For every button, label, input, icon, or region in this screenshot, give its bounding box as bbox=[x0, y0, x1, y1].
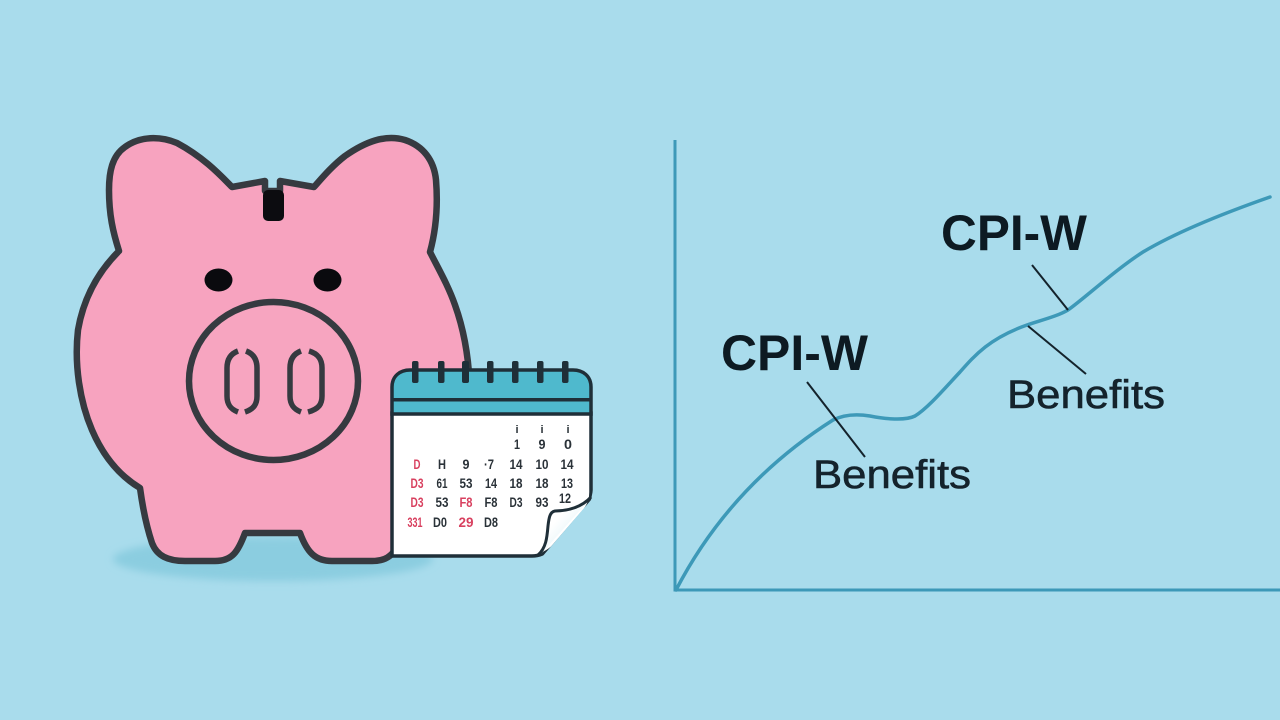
calendar dates: 12 bbox=[559, 490, 571, 506]
calendar dates: 53 bbox=[460, 475, 473, 491]
calendar dates: D bbox=[414, 456, 420, 472]
chart axes bbox=[675, 140, 1280, 590]
calendar dates: 0 bbox=[564, 436, 572, 452]
calendar dates: i bbox=[566, 424, 570, 436]
calendar dates: F8 bbox=[460, 494, 473, 510]
header divider bbox=[392, 398, 591, 402]
left Benefits label: Benefits bbox=[813, 453, 971, 497]
calendar dates: 93 bbox=[536, 494, 549, 510]
calendar dates: ·7 bbox=[484, 456, 494, 472]
page curl bbox=[538, 490, 600, 560]
right CPI-W leader line bbox=[1032, 265, 1068, 310]
binder rings bbox=[412, 361, 568, 383]
calendar dates: D3 bbox=[410, 475, 424, 491]
calendar dates: 13 bbox=[561, 475, 573, 491]
calendar dates: D8 bbox=[484, 514, 498, 530]
calendar bbox=[392, 361, 600, 560]
right CPI-W label: CPI-W bbox=[941, 205, 1088, 261]
calendar dates: D0 bbox=[433, 514, 447, 530]
calendar dates: 14 bbox=[560, 456, 574, 472]
calendar dates: 14 bbox=[485, 475, 497, 491]
calendar dates: 1 bbox=[514, 436, 520, 452]
calendar dates: 61 bbox=[436, 475, 448, 491]
left CPI-W leader line bbox=[807, 382, 865, 457]
calendar dates: i bbox=[515, 424, 519, 436]
piggy bank illustration bbox=[77, 138, 470, 581]
right nostril bbox=[290, 351, 322, 412]
calendar dates: 9 bbox=[538, 436, 546, 452]
calendar dates: i bbox=[540, 424, 544, 436]
calendar dates: D3 bbox=[410, 494, 424, 510]
calendar dates: 14 bbox=[510, 456, 523, 472]
left eye bbox=[204, 268, 232, 292]
calendar dates: F8 bbox=[484, 494, 498, 510]
pig body bbox=[77, 138, 470, 561]
calendar dates: 10 bbox=[536, 456, 549, 472]
calendar header bbox=[392, 370, 591, 414]
calendar dates: 331 bbox=[408, 514, 423, 530]
left nostril bbox=[227, 351, 257, 412]
calendar dates: 18 bbox=[510, 475, 523, 491]
right Benefits leader line bbox=[1028, 326, 1086, 374]
line chart bbox=[675, 140, 1280, 590]
right eye bbox=[314, 268, 342, 292]
calendar page bbox=[392, 412, 591, 556]
coin slot bbox=[263, 190, 284, 221]
snout bbox=[189, 302, 358, 460]
calendar dates bbox=[408, 424, 574, 530]
benefits curve bbox=[676, 197, 1270, 590]
calendar dates: 53 bbox=[436, 494, 449, 510]
calendar dates: 18 bbox=[536, 475, 549, 491]
calendar dates: H bbox=[438, 456, 446, 472]
calendar dates: 9 bbox=[462, 456, 470, 472]
ground shadow bbox=[113, 537, 433, 581]
calendar dates: 29 bbox=[458, 514, 474, 530]
left CPI-W label: CPI-W bbox=[721, 325, 869, 381]
calendar dates: D3 bbox=[510, 494, 523, 510]
right Benefits label: Benefits bbox=[1007, 373, 1165, 417]
